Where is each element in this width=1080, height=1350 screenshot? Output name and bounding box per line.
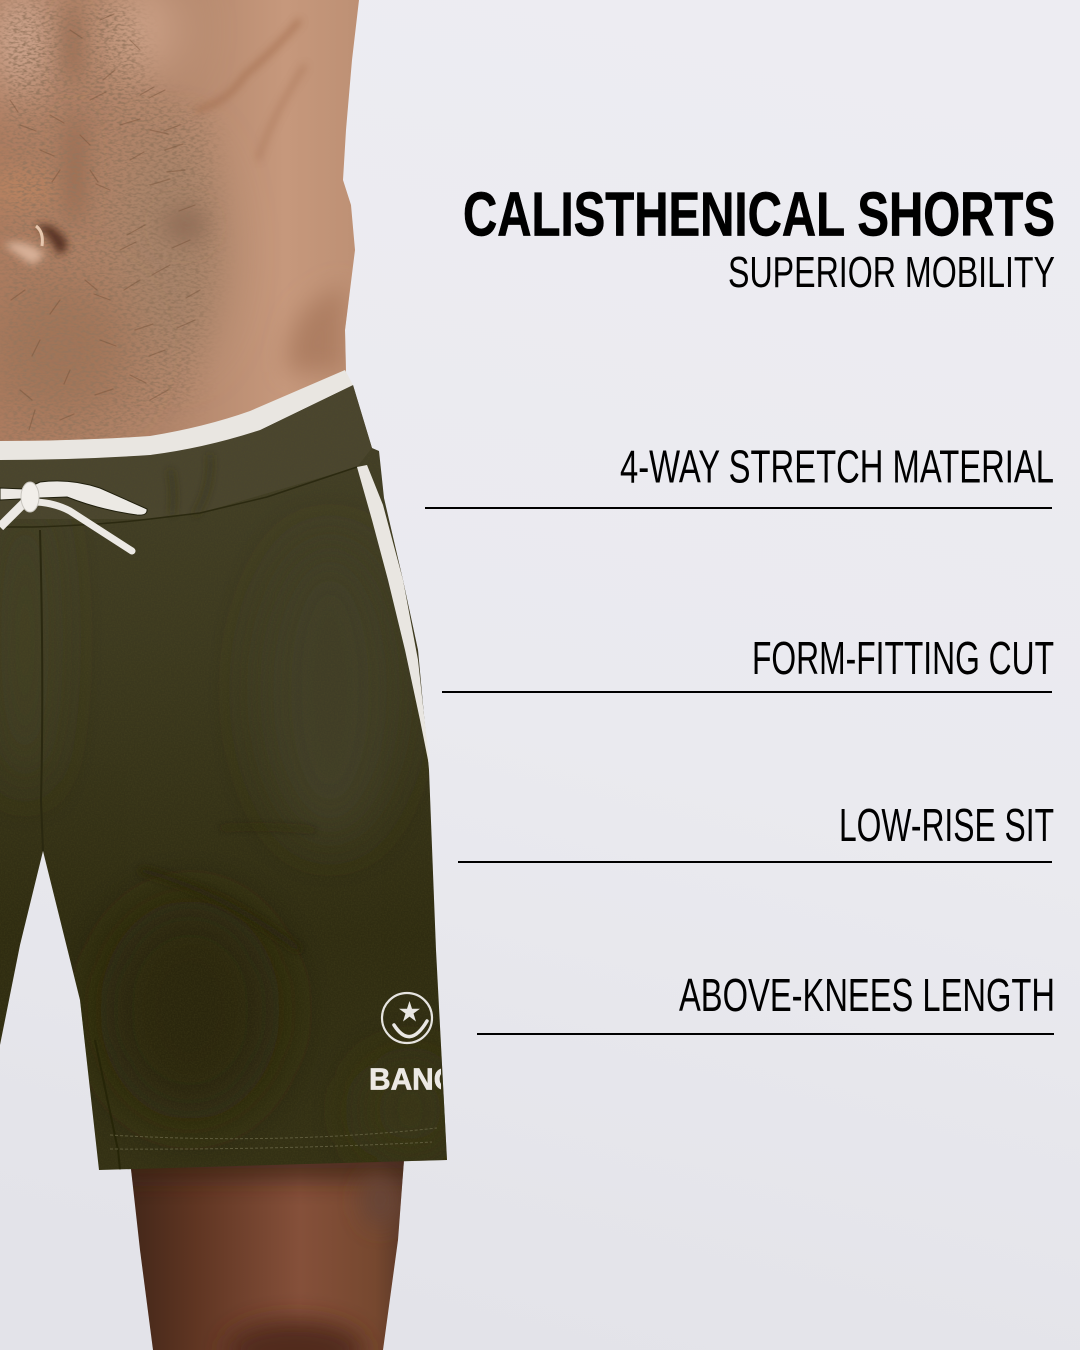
body hair strokes <box>10 14 200 430</box>
drawstring tie <box>0 481 147 551</box>
torso skin <box>0 0 380 450</box>
waistband seam <box>0 467 357 527</box>
photo: model torso and shorts <box>0 0 460 1350</box>
body hair texture <box>0 0 220 440</box>
left thigh skin <box>131 1161 404 1350</box>
white waistband trim <box>0 370 353 460</box>
hem stitching <box>110 1128 437 1149</box>
shorts body <box>0 370 460 1180</box>
fly seam <box>40 530 43 851</box>
inner leg seam <box>95 1040 120 1170</box>
fabric texture <box>4 482 440 1145</box>
white side piping <box>357 465 430 770</box>
logo: smiley star badge <box>382 993 432 1043</box>
navel <box>36 225 67 254</box>
waistband shading <box>0 385 372 519</box>
brand logo <box>370 992 441 1090</box>
logo: brand wordmark: BANG <box>369 1062 457 1096</box>
